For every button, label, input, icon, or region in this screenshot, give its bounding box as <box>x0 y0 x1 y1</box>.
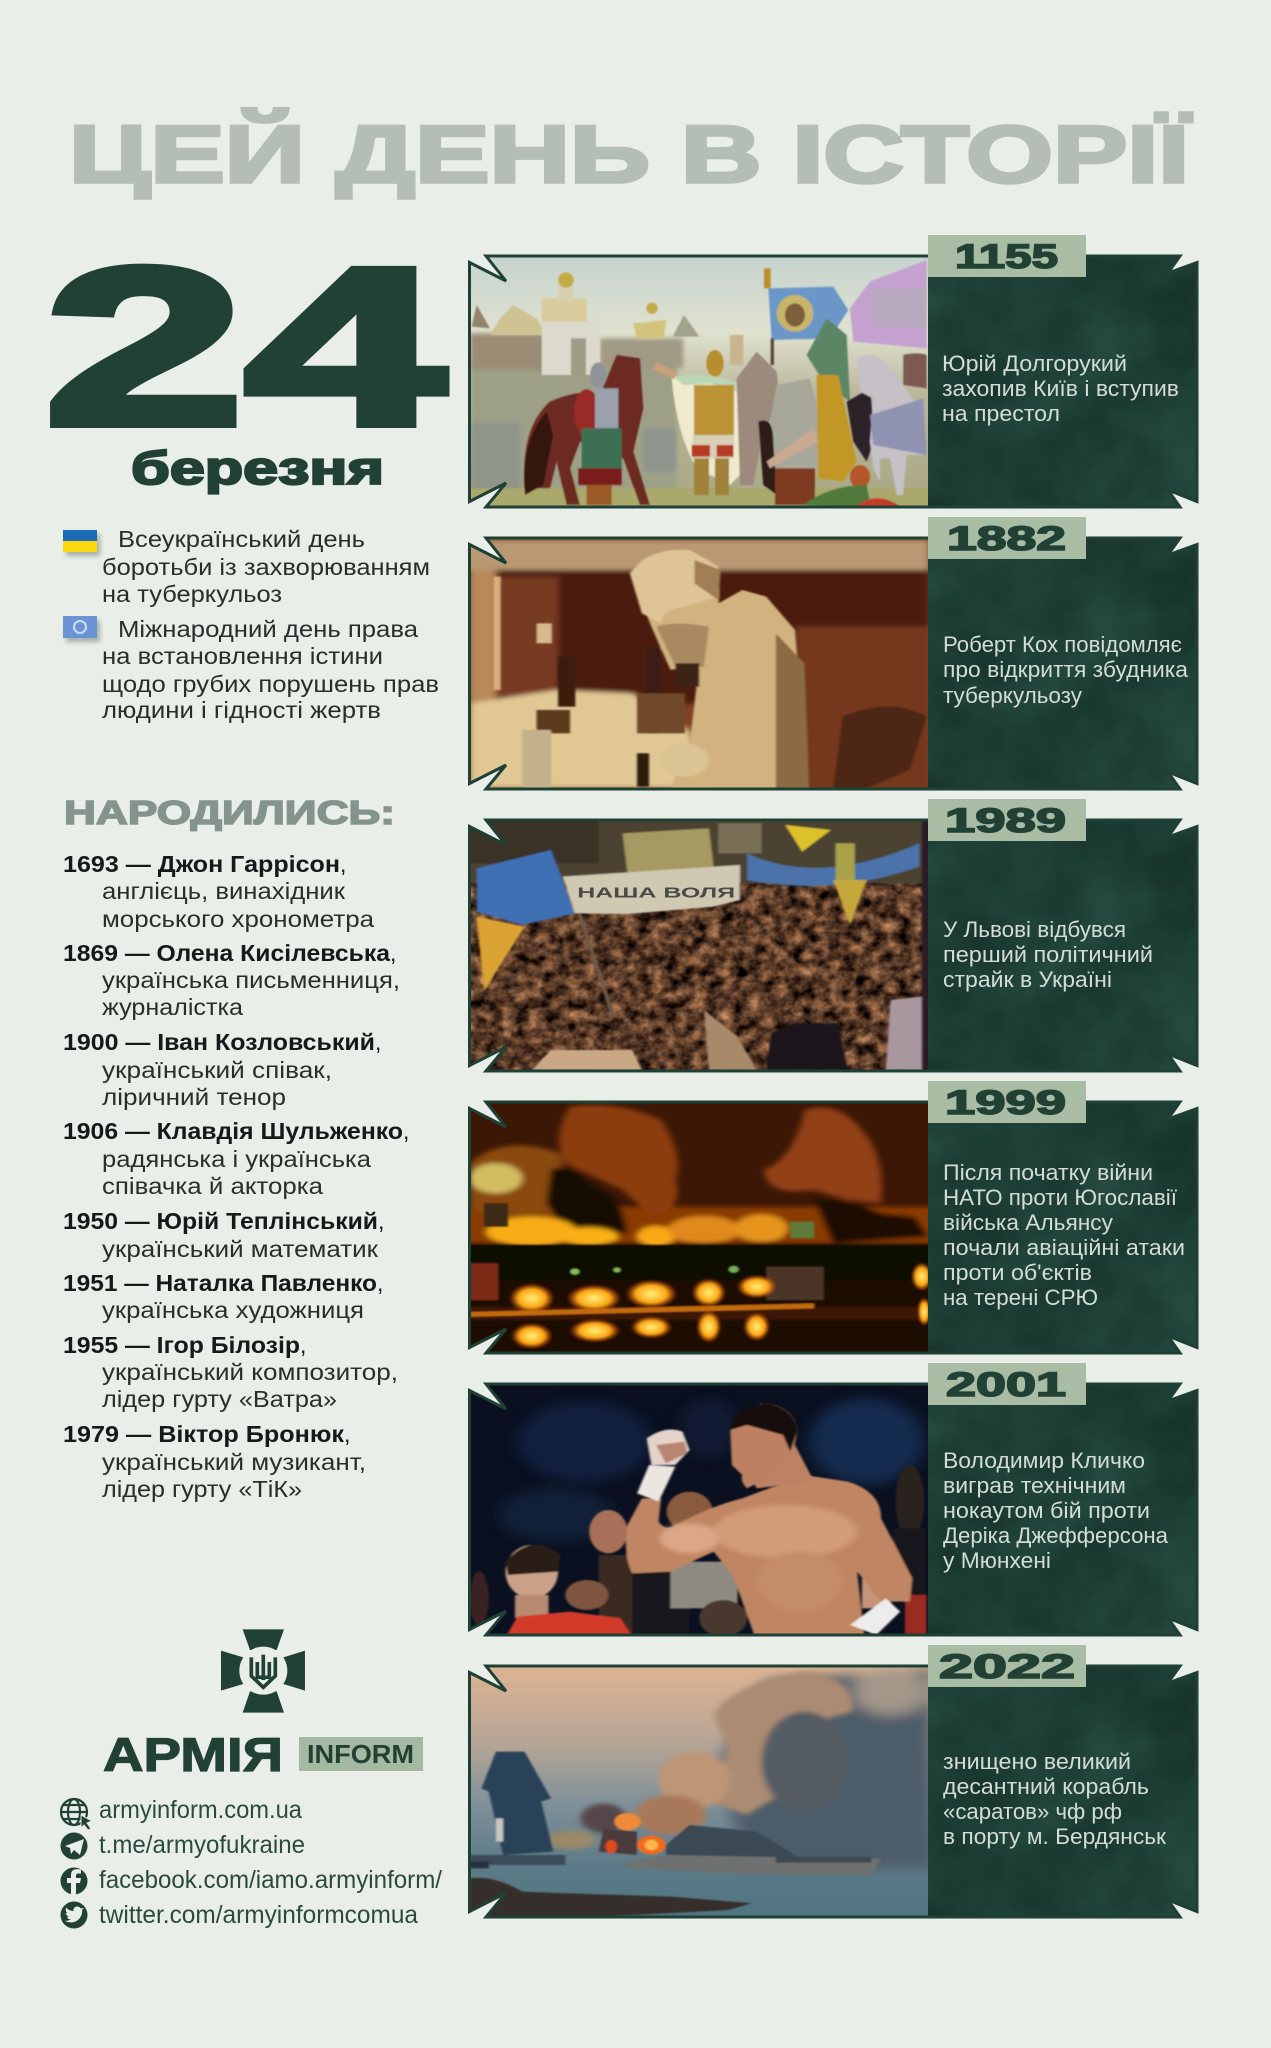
icon: Ukrainian flag <box>63 530 100 556</box>
text: Ukrainian observance: боротьби із захворюванням <box>102 554 430 580</box>
year tab: 1999 <box>945 1084 1066 1122</box>
event text: нокаутом бій проти <box>943 1498 1150 1523</box>
panel: 1882 <box>460 517 1203 797</box>
event text <box>943 917 1153 992</box>
event text: туберкульозу <box>943 683 1082 708</box>
logo badge: INFORM: INFORM <box>307 1739 414 1769</box>
event text: НАТО проти Югославії <box>943 1185 1177 1210</box>
text: Ukrainian observance: Всеукраїнський день <box>118 526 365 552</box>
event text: Деріка Джефферсона <box>943 1523 1169 1548</box>
list of births: , <box>403 1118 409 1144</box>
text: UN observance: на встановлення істини <box>102 643 383 669</box>
frame <box>470 1102 1197 1353</box>
list of births: , <box>377 1270 383 1296</box>
year tab: 1989 <box>945 802 1066 840</box>
photo: burning city at night <box>471 1104 928 1352</box>
event text: у Мюнхені <box>943 1548 1051 1573</box>
photo: Yuri Dolgoruky at Kyiv <box>467 255 937 512</box>
year tab: 2001 <box>946 1366 1066 1404</box>
list of births: український композитор, <box>102 1359 398 1385</box>
list of births: , <box>344 1421 350 1447</box>
event text: «саратов» чф рф <box>943 1799 1122 1824</box>
list of births: журналістка <box>102 994 243 1020</box>
panel: 1155 <box>467 235 1203 512</box>
icon: twitter <box>60 1902 88 1928</box>
list of births: лідер гурту «ТіК» <box>102 1476 302 1502</box>
frame <box>470 1666 1197 1917</box>
event text: виграв технічним <box>943 1473 1126 1498</box>
list of births: український співак, <box>102 1057 332 1083</box>
event text: перший політичний <box>943 942 1153 967</box>
list of births: , <box>390 940 396 966</box>
text: UN observance <box>102 616 439 723</box>
list of births: англієць, винахідник <box>102 878 346 904</box>
year tab: 1882 <box>947 520 1066 558</box>
event text: проти об'єктів <box>943 1260 1092 1285</box>
list of births: співачка й акторка <box>102 1173 323 1199</box>
panel: 2022 <box>460 1645 1203 1922</box>
list of births: морського хронометра <box>102 906 374 932</box>
event text: У Львові відбувся <box>943 917 1126 942</box>
logo emblem <box>221 1629 305 1713</box>
event text <box>942 351 1179 426</box>
panel: 1989 <box>460 799 1203 1083</box>
event text: про відкриття збудника <box>943 657 1189 682</box>
info block <box>928 255 1203 511</box>
event text <box>943 1448 1169 1573</box>
frame <box>470 256 1197 507</box>
photo: Lviv strike crowd <box>471 822 928 1070</box>
list of births: , <box>340 851 346 877</box>
year tab <box>928 235 1086 277</box>
year tab: 1155 <box>955 238 1058 276</box>
list of births: 1979 — Віктор Бронюк <box>63 1421 345 1447</box>
event text: страйк в Україні <box>943 967 1112 992</box>
panel: 2001 <box>460 1363 1203 1648</box>
list of births: радянська і українська <box>102 1146 371 1172</box>
icon: facebook <box>60 1868 88 1895</box>
event text: Роберт Кох повідомляє <box>943 632 1182 657</box>
year tab <box>928 1363 1086 1405</box>
event text: десантний корабль <box>943 1774 1149 1799</box>
event text: на терені СРЮ <box>943 1285 1098 1310</box>
info block <box>928 1383 1203 1639</box>
icon: UN flag <box>63 616 100 642</box>
list of births: 1955 — Ігор Білозір <box>63 1332 300 1358</box>
frame <box>470 1384 1197 1635</box>
event text: знищено великий <box>943 1749 1131 1774</box>
text: Ukrainian observance: на туберкульоз <box>102 581 282 607</box>
list of births: , <box>378 1208 384 1234</box>
heading: born: НАРОДИЛИСЬ: <box>64 794 395 831</box>
year tab <box>928 799 1086 841</box>
event text: на престол <box>942 401 1060 426</box>
event text: війська Альянсу <box>943 1210 1113 1235</box>
event text: Володимир Кличко <box>943 1448 1145 1473</box>
list of births: українська художниця <box>102 1297 364 1323</box>
text: UN observance: людини і гідності жертв <box>102 697 381 723</box>
list of births: лідер гурту «Ватра» <box>102 1386 337 1412</box>
list of births: , <box>375 1029 381 1055</box>
list of births: український музикант, <box>102 1449 366 1475</box>
frame <box>470 820 1197 1071</box>
frame <box>470 538 1197 789</box>
text: Ukrainian observance <box>102 526 430 607</box>
icon: telegram <box>60 1832 88 1860</box>
list of births: 1951 — Наталка Павленко <box>63 1270 377 1296</box>
link: facebook: facebook.com/iamo.armyinform/ <box>99 1866 442 1894</box>
list of births <box>63 851 409 1502</box>
title: ЦЕЙ ДЕНЬ В ІСТОРІЇ <box>69 108 1193 200</box>
list of births: 1869 — Олена Кисілевська <box>63 940 390 966</box>
list of births: 1900 — Іван Козловський <box>63 1029 375 1055</box>
info block <box>928 537 1203 793</box>
text: UN observance: щодо грубих порушень прав <box>102 671 439 697</box>
text: UN observance: Міжнародний день права <box>118 616 418 642</box>
photo: Klitschko flexing <box>471 1386 928 1634</box>
event text <box>943 632 1189 708</box>
icon: website globe <box>61 1799 92 1830</box>
info block <box>928 1665 1203 1921</box>
event text: Після початку війни <box>943 1160 1153 1185</box>
panel: 1999 <box>460 1081 1203 1363</box>
year tab: 2022 <box>939 1648 1075 1686</box>
photo: Lviv strike crowd: НАША ВОЛЯ <box>577 884 735 901</box>
logo wordmark: АРМІЯ <box>103 1728 283 1781</box>
year tab <box>928 1081 1086 1123</box>
year tab <box>928 517 1086 559</box>
event text: в порту м. Бердянськ <box>943 1824 1166 1849</box>
info block <box>928 819 1203 1075</box>
list of births: , <box>300 1332 306 1358</box>
list of births: українська письменниця, <box>102 967 400 993</box>
event text <box>943 1749 1166 1849</box>
list of births: 1693 — Джон Гаррісон <box>63 851 340 877</box>
event text <box>943 1160 1185 1310</box>
info block <box>928 1101 1203 1357</box>
year tab <box>928 1645 1086 1687</box>
list of births: 1950 — Юрій Теплінський <box>63 1208 378 1234</box>
link: telegram: t.me/armyofukraine <box>99 1831 305 1859</box>
list of births: український математик <box>102 1236 379 1262</box>
photo: burning ship in Berdiansk <box>460 1662 938 1922</box>
event text: захопив Київ і вступив <box>942 376 1179 401</box>
date number: 24 <box>44 222 445 472</box>
list of births: 1906 — Клавдія Шульженко <box>63 1118 403 1144</box>
event text: Юрій Долгорукий <box>942 351 1127 376</box>
link: website: armyinform.com.ua <box>99 1796 302 1824</box>
link: twitter: twitter.com/armyinformcomua <box>99 1901 418 1929</box>
event text: почали авіаційні атаки <box>943 1235 1185 1260</box>
month: березня <box>131 442 384 494</box>
list of births: ліричний тенор <box>102 1084 286 1110</box>
photo: Robert Koch at microscope <box>471 540 928 788</box>
